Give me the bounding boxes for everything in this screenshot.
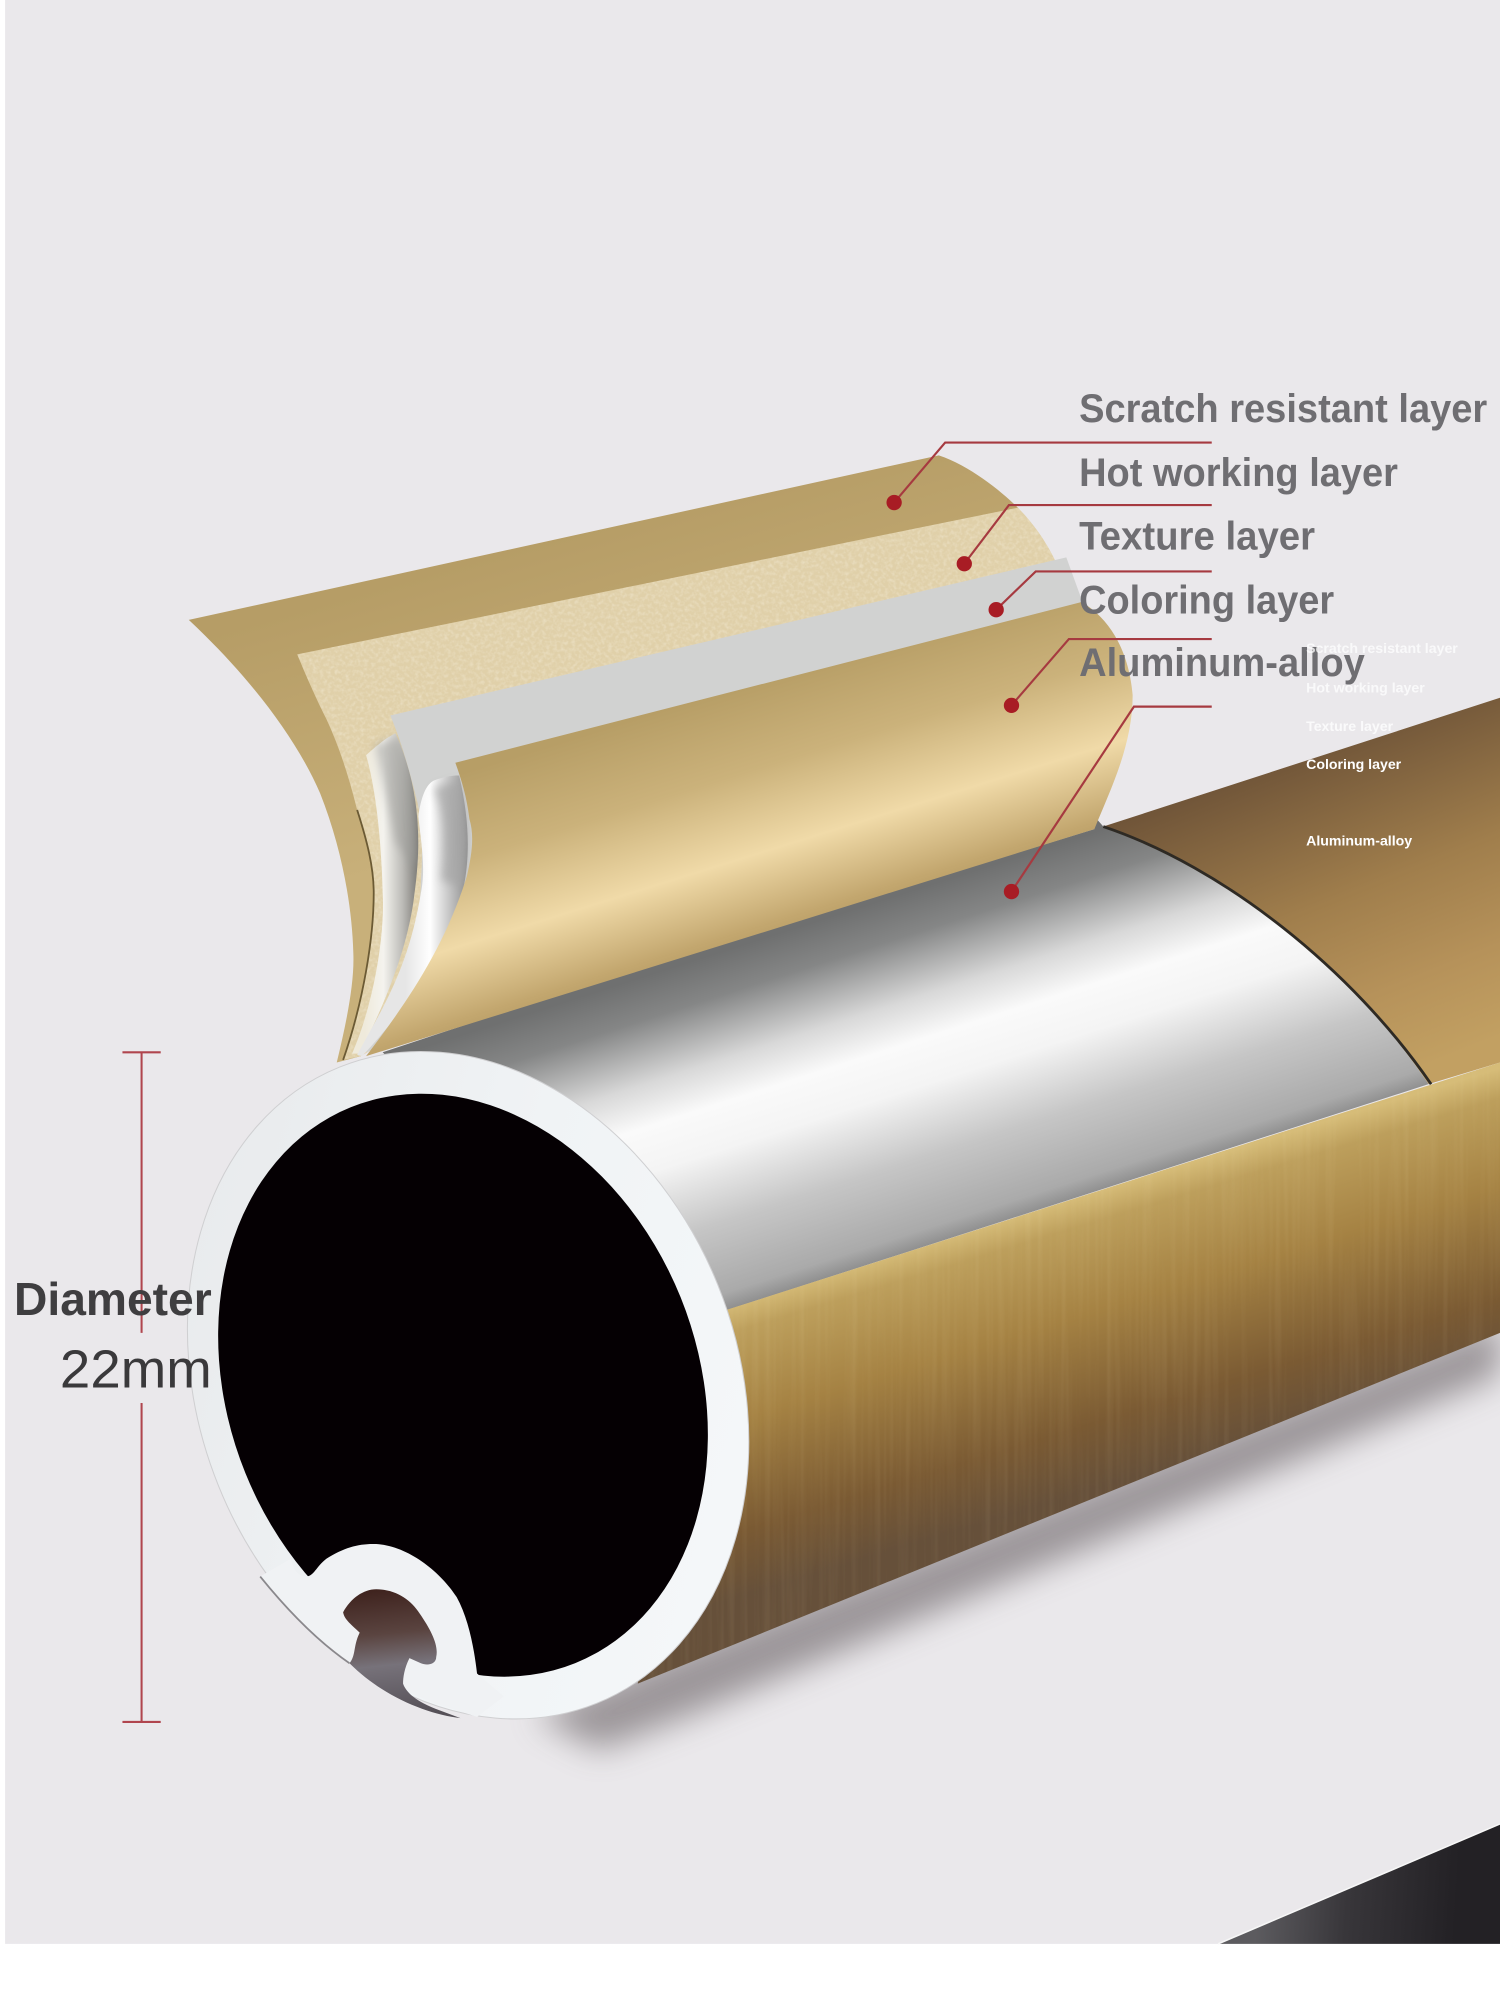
exposed silver aluminium core — [383, 816, 1429, 1310]
T slot — [343, 1589, 460, 1718]
diameter label: Diameter — [14, 1273, 212, 1325]
tube end cross-section — [90, 966, 846, 1804]
peeled layer: coloring — [361, 557, 1094, 1054]
diameter dimension line — [122, 1052, 161, 1722]
silver curl under texture layer — [352, 733, 418, 1054]
outer ring — [90, 966, 846, 1804]
small white labels: Coloring layer — [1306, 756, 1402, 772]
arc edge of gold section — [1103, 827, 1431, 1084]
small white labels: Texture layer — [1306, 718, 1394, 734]
tube shadow — [536, 1320, 1500, 1750]
layer labels — [1079, 387, 1487, 685]
rail channel lobe — [260, 1544, 504, 1717]
layer labels: Aluminum-alloy — [1079, 641, 1365, 685]
leader: scratch resistant layer — [894, 443, 1212, 503]
layer labels: Coloring layer — [1079, 579, 1334, 623]
dark surface corner — [1218, 1824, 1500, 1944]
tube body — [383, 698, 1500, 1696]
leader: coloring layer — [1011, 639, 1212, 705]
layer labels: Hot working layer — [1079, 451, 1398, 495]
diameter value: 22mm — [60, 1341, 212, 1400]
small white labels: Hot working layer — [1306, 680, 1425, 696]
layer labels: Texture layer — [1079, 515, 1315, 559]
cut-away at lower edge — [230, 1551, 460, 1767]
lower gold section — [612, 1046, 1500, 1696]
peeled layer: hot working texture — [293, 504, 1084, 1065]
callout leader lines — [894, 443, 1212, 892]
outer edge line — [260, 1577, 349, 1663]
upper gold section — [1103, 698, 1500, 1084]
peeled layer: aluminium foil gold — [366, 602, 1133, 1056]
leader: hot working layer — [964, 505, 1212, 564]
leader: aluminum alloy — [1011, 707, 1212, 892]
small white labels — [1306, 640, 1458, 849]
white curl under top layer — [357, 776, 468, 1056]
small white labels: Scratch resistant layer — [1306, 640, 1458, 656]
leader: texture layer — [996, 571, 1212, 610]
layer labels: Scratch resistant layer — [1079, 387, 1487, 431]
peeled layer: scratch resistant — [189, 455, 1082, 1062]
hollow interior — [133, 1019, 793, 1751]
small white labels: Aluminum-alloy — [1306, 833, 1412, 849]
callout dots — [886, 495, 1019, 899]
